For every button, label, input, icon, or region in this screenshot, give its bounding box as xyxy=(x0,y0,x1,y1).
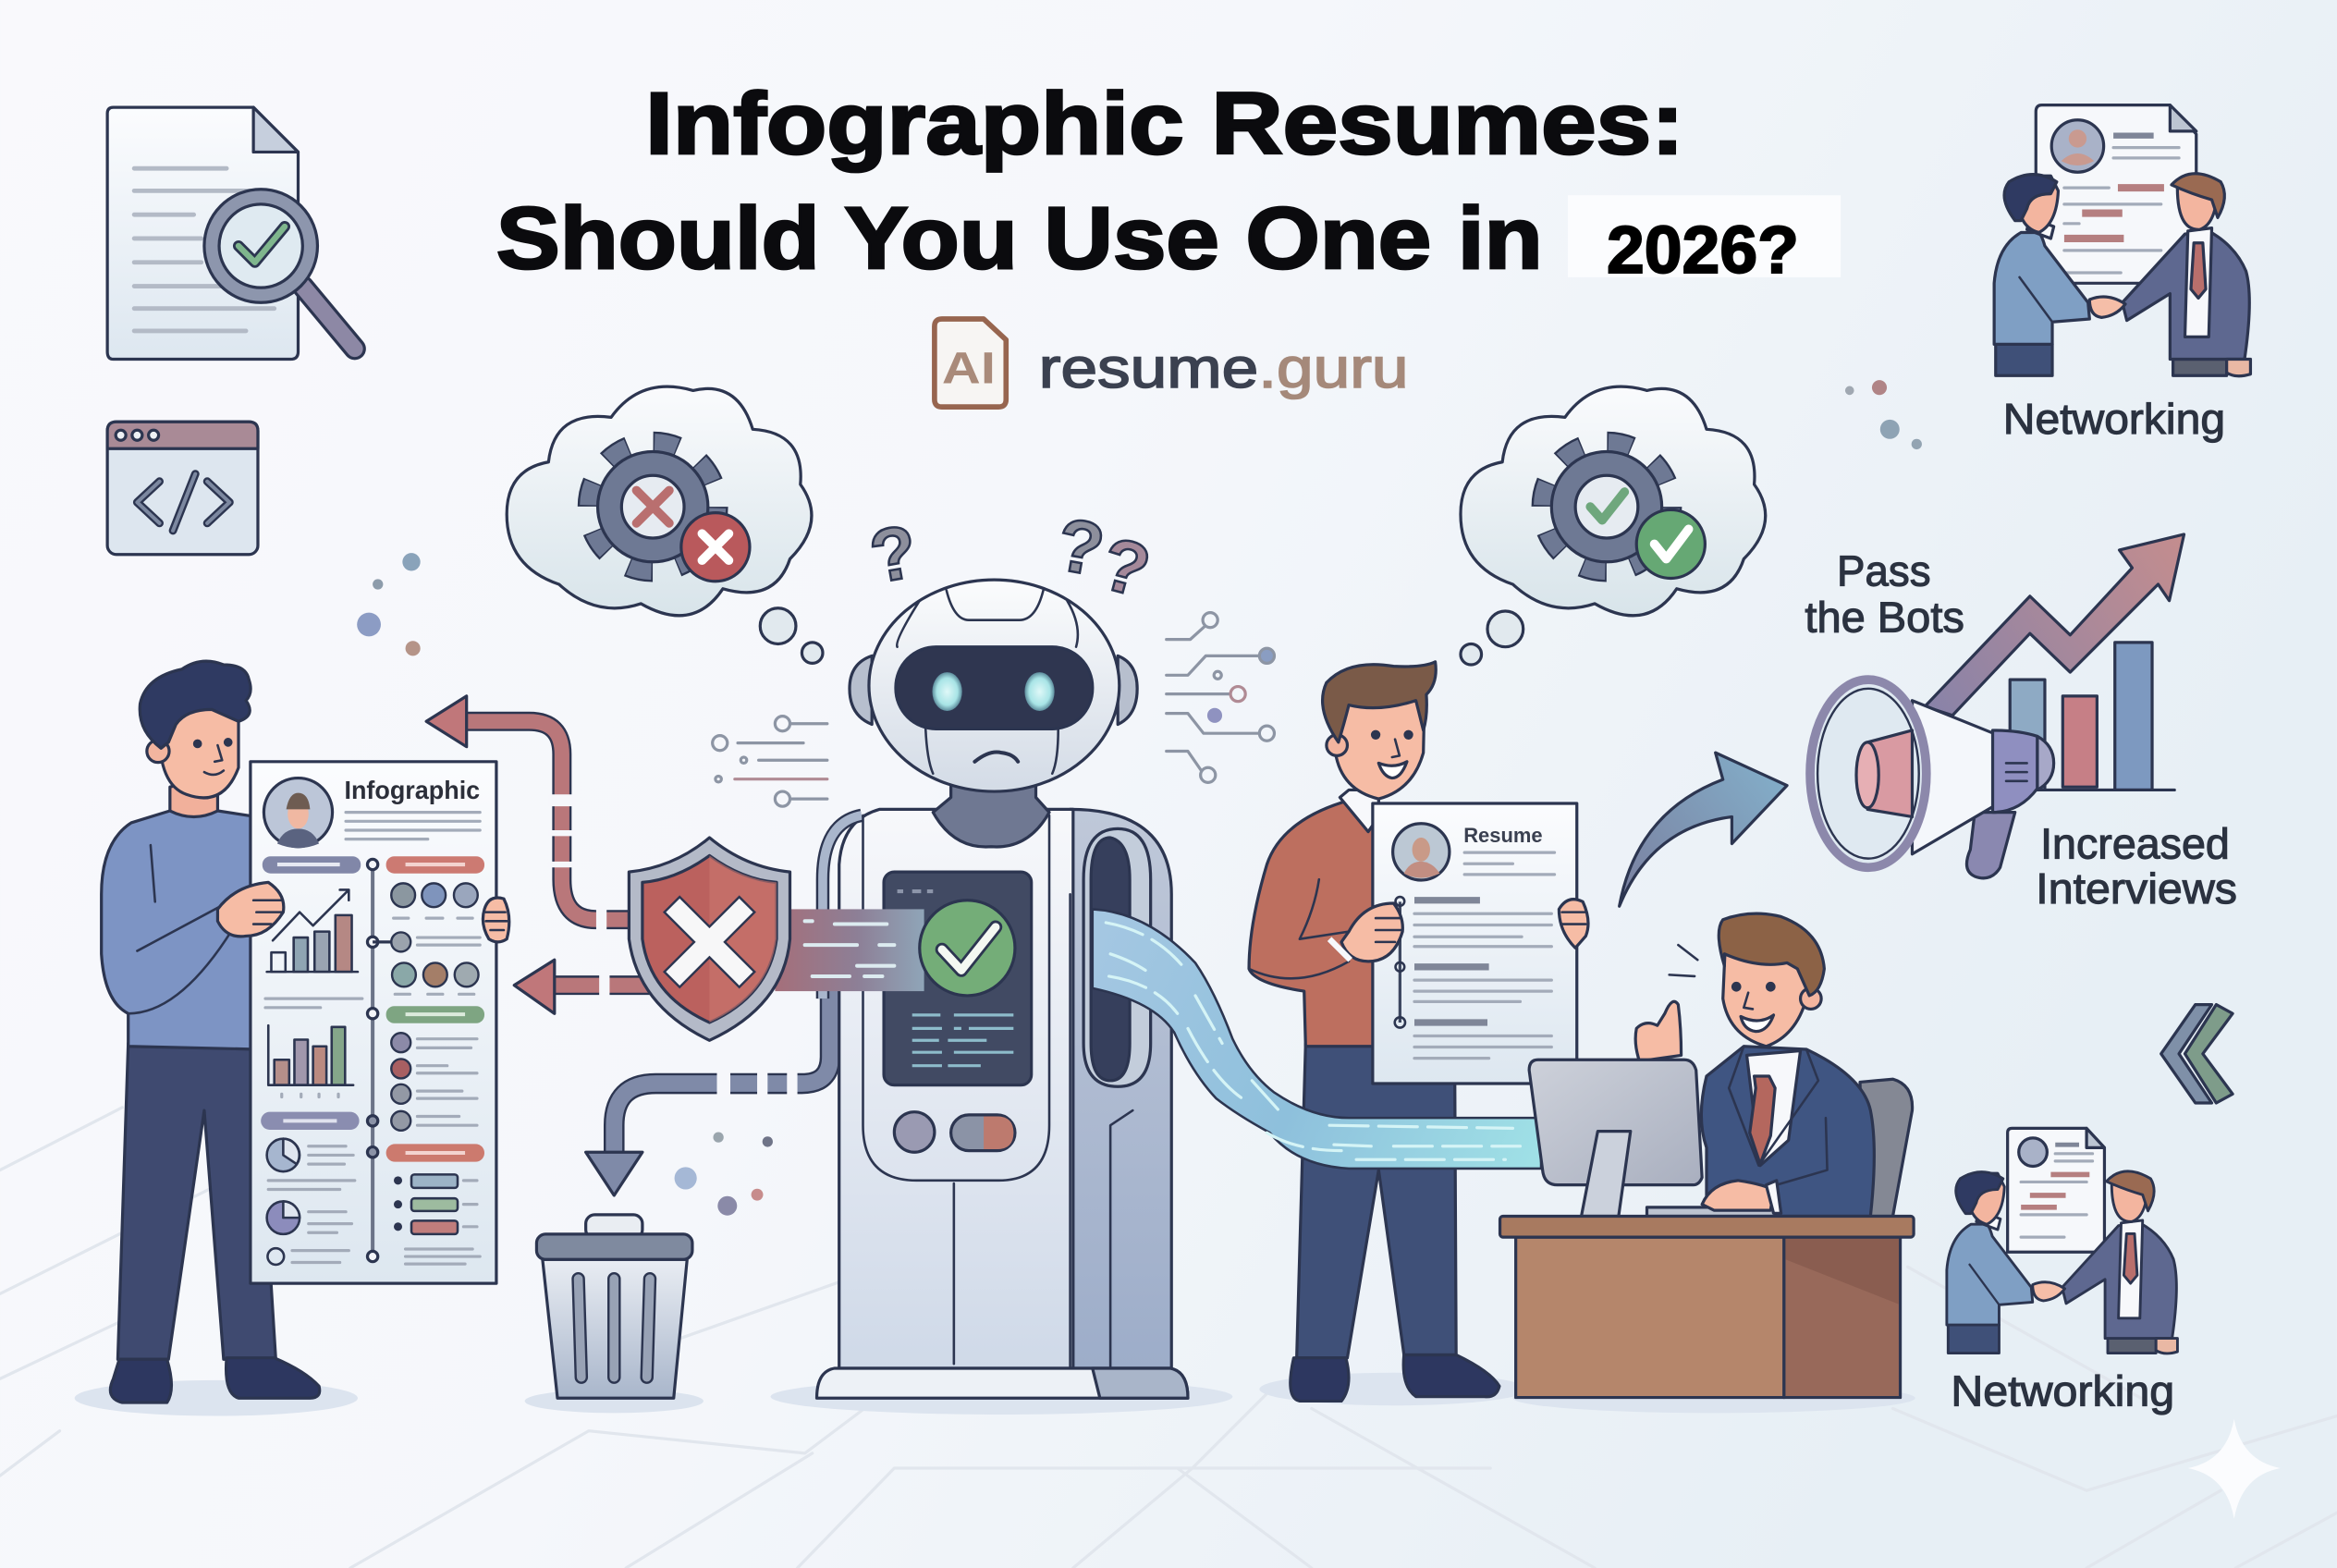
sheet bar chart 1 xyxy=(267,889,358,972)
sheet bar chart 2 xyxy=(268,1025,353,1097)
robot body xyxy=(839,809,1073,1368)
recruiter jacket xyxy=(1701,1047,1874,1217)
label: Pass the Bots: Pass xyxy=(1837,547,1931,595)
data beam through shield xyxy=(775,909,924,991)
robot ears xyxy=(850,655,872,725)
left person head xyxy=(159,693,239,798)
networking handshake people xyxy=(1994,174,2250,376)
double chevron xyxy=(2161,1005,2233,1103)
recruiter head xyxy=(1723,932,1806,1047)
bar chart xyxy=(2010,643,2174,790)
robot question marks: ? xyxy=(1051,503,1110,593)
sheet list items xyxy=(391,1033,410,1131)
robot chest screen xyxy=(884,872,1032,1085)
recruiter hand and keyboard xyxy=(1647,1181,1781,1217)
title: 2026? xyxy=(1607,213,1799,288)
robot neck xyxy=(933,782,1049,847)
left person legs xyxy=(117,1044,275,1359)
logo: resume.guru: resume .guru xyxy=(1039,337,1409,399)
middle person hands xyxy=(1341,903,1402,962)
robot xyxy=(771,580,1232,1415)
resume avatar xyxy=(1393,824,1450,880)
left person sweater xyxy=(102,811,256,1049)
robot buttons xyxy=(894,1112,1015,1152)
recruiter thumbs up xyxy=(1635,1001,1682,1061)
robot question marks: ? xyxy=(1093,521,1158,614)
desk xyxy=(1500,1217,1914,1398)
sheet heading: Infographic: Infographic xyxy=(344,776,480,804)
label: Increased Interviews: Increased xyxy=(2040,820,2230,868)
label: Pass the Bots xyxy=(1805,547,1964,642)
robot eyes xyxy=(932,672,1055,711)
computer monitor xyxy=(1529,1060,1702,1217)
label: Increased Interviews: Interviews xyxy=(2036,864,2237,913)
robot right slot xyxy=(1083,828,1151,1086)
robot base xyxy=(817,1368,1188,1398)
sheet skill icons xyxy=(391,883,479,986)
decorative dots xyxy=(357,380,1922,1216)
sheet pie chart 2 xyxy=(267,1201,300,1234)
middle person sweater xyxy=(1249,801,1378,1047)
trash can xyxy=(525,1215,704,1413)
red reject arrow up xyxy=(426,696,638,936)
curved arrow xyxy=(1620,753,1787,906)
title xyxy=(496,75,1841,288)
robot visor xyxy=(896,647,1093,729)
title: Infographic Resumes: xyxy=(645,75,1684,173)
sparkle star xyxy=(2188,1419,2281,1519)
robot question marks xyxy=(864,503,1158,614)
trend arrow xyxy=(1925,534,2184,716)
resume sheet xyxy=(1373,803,1577,1084)
networking people bottom xyxy=(1947,1171,2177,1354)
thought cloud: rejection xyxy=(507,386,823,663)
recruiter tie xyxy=(1750,1076,1775,1164)
left person hands xyxy=(217,882,284,937)
middle person holding resume xyxy=(1249,662,1588,1405)
icon: document with magnifying glass xyxy=(107,107,355,360)
sheet avatar xyxy=(263,778,333,848)
icon: code window xyxy=(107,422,258,555)
robot head xyxy=(869,580,1120,791)
resume heading: Resume xyxy=(1463,824,1543,847)
green approval badge xyxy=(920,900,1015,996)
label: Networking top: Networking xyxy=(2003,395,2225,443)
red reject arrow left xyxy=(514,960,655,1013)
title: Should You Use One in xyxy=(496,190,1543,288)
recruiter at desk xyxy=(1500,913,1915,1413)
logo: resume.guru: AI xyxy=(942,343,996,393)
networking illustration top xyxy=(1994,105,2250,376)
robot question marks: ? xyxy=(864,509,924,599)
networking resume document bottom xyxy=(2008,1128,2104,1252)
infographic resume sheet xyxy=(251,762,496,1283)
middle person head xyxy=(1336,682,1425,799)
networking illustration bottom xyxy=(1947,1128,2177,1354)
thought cloud: approval xyxy=(1461,386,1766,665)
blue data flow to recruiter xyxy=(1093,909,1541,1169)
megaphone xyxy=(1810,680,2054,878)
label: Pass the Bots: the Bots xyxy=(1805,594,1964,642)
grey arrow to trash xyxy=(586,984,830,1195)
label: Networking bottom: Networking xyxy=(1951,1366,2174,1415)
office chair xyxy=(1860,1079,1913,1217)
sheet pie chart 1 xyxy=(267,1139,300,1171)
sheet progress bars xyxy=(394,1174,458,1234)
circuit lines right of robot xyxy=(1167,613,1274,782)
networking resume document xyxy=(2036,105,2196,283)
middle person legs xyxy=(1297,1044,1456,1358)
left person holding infographic resume xyxy=(75,661,509,1416)
label: Increased Interviews xyxy=(2036,820,2237,913)
logo: resume.guru xyxy=(935,319,1409,407)
shield with X xyxy=(629,838,790,1040)
robot right side xyxy=(1071,809,1171,1368)
circuit lines left of robot xyxy=(713,717,827,806)
background circuit lines xyxy=(0,1108,2337,1568)
